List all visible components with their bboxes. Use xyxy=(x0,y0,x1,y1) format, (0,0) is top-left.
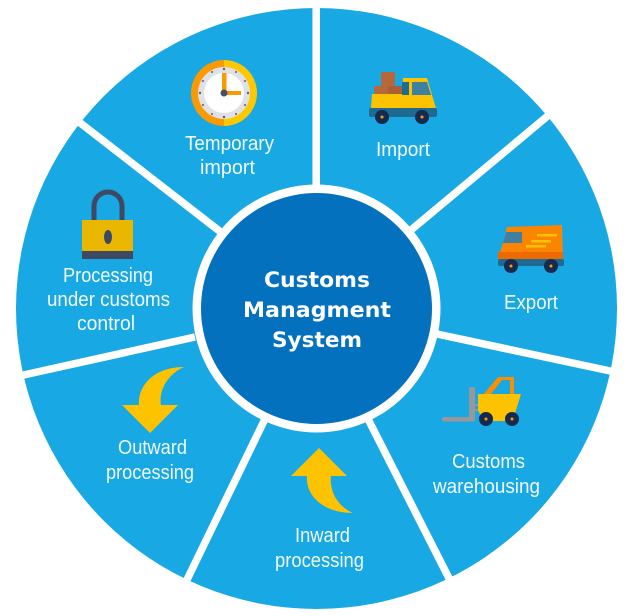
segment: inward processing xyxy=(275,448,364,572)
segment: temporary import xyxy=(185,60,274,179)
segment: customs warehousing xyxy=(432,377,540,498)
label: customs warehousing: Customs xyxy=(452,451,525,473)
label: processing under customs control xyxy=(47,265,170,335)
icon: downward curved arrow xyxy=(122,367,184,433)
hub title xyxy=(243,268,391,352)
label: outward processing: processing xyxy=(106,462,194,484)
label: temporary import xyxy=(185,133,274,179)
icon: forklift xyxy=(442,377,521,426)
label: inward processing: processing xyxy=(275,550,364,572)
label: customs warehousing: warehousing xyxy=(432,476,540,498)
segment: outward processing xyxy=(106,367,194,484)
segment: export xyxy=(498,225,564,314)
label: inward processing xyxy=(275,525,364,572)
label: outward processing xyxy=(106,437,194,484)
icon: delivery truck with boxes xyxy=(369,72,437,124)
label: import: Import xyxy=(376,139,430,161)
label: outward processing: Outward xyxy=(118,437,187,459)
label: processing under customs control: Processing xyxy=(63,265,153,287)
label: inward processing: Inward xyxy=(295,525,350,547)
icon: upward curved arrow xyxy=(291,448,353,513)
hub title: Customs xyxy=(264,268,370,292)
icon: clock xyxy=(191,60,257,126)
label: customs warehousing xyxy=(432,451,540,498)
hub title: Managment xyxy=(243,298,391,322)
icon: orange van xyxy=(498,225,564,273)
label: processing under customs control: under customs xyxy=(47,289,170,311)
label: processing under customs control: control xyxy=(77,313,135,335)
label: export: Export xyxy=(504,292,558,314)
segment: processing under customs control xyxy=(47,192,170,335)
icon: padlock xyxy=(82,192,133,259)
segment: import xyxy=(369,72,437,161)
hub title: System xyxy=(272,328,362,352)
center hub xyxy=(192,184,440,432)
label: temporary import: Temporary xyxy=(185,133,274,155)
label: temporary import: import xyxy=(200,157,255,179)
